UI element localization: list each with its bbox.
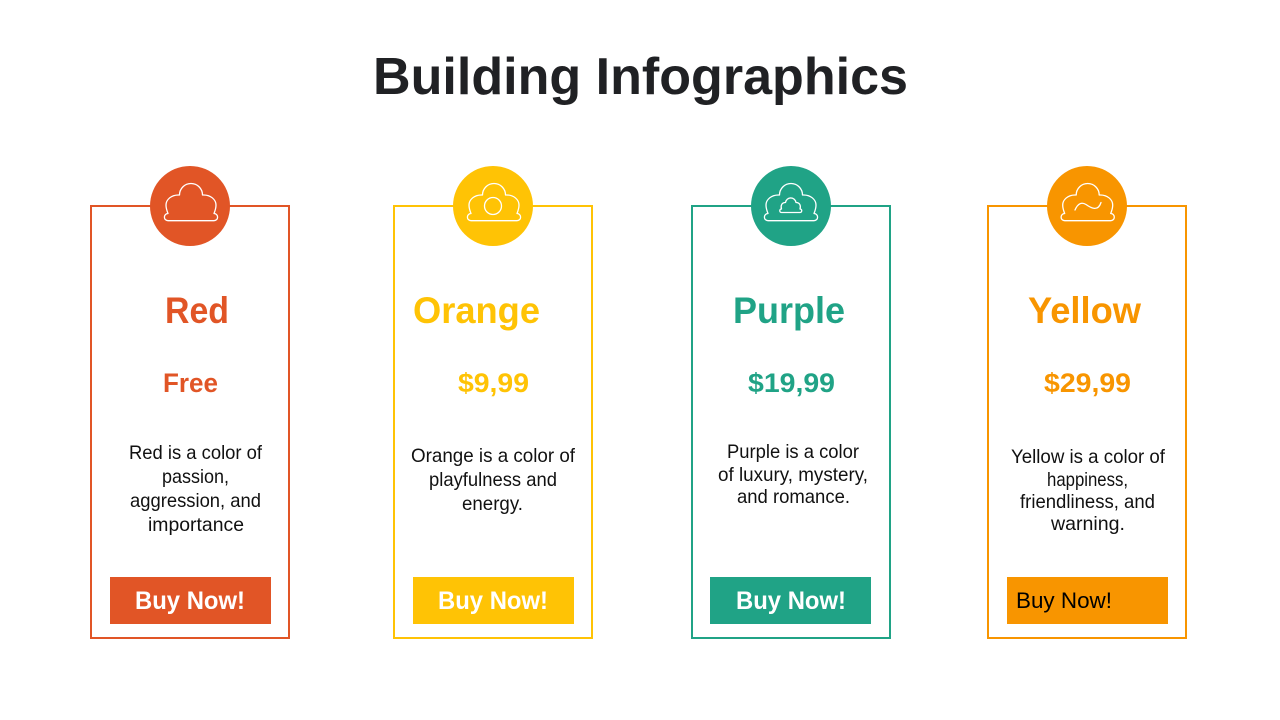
card border (692, 206, 890, 638)
description (129, 442, 263, 536)
panel: red plan (91, 166, 289, 638)
description: playfulness and (429, 469, 557, 491)
icon: cloud with small inner cloud (751, 166, 831, 246)
button: Buy Now! (135, 587, 245, 615)
price: $19,99 (748, 368, 835, 398)
description: of luxury, mystery, (718, 464, 868, 486)
button: Buy Now! (736, 587, 846, 615)
button: Buy Now! (438, 587, 548, 615)
icon: plain cloud (150, 166, 230, 246)
description: warning. (1050, 513, 1125, 535)
button (710, 577, 871, 624)
button (1007, 577, 1168, 624)
description (718, 441, 868, 508)
description (411, 445, 576, 515)
description: and romance. (737, 486, 850, 508)
description: Red is a color of (129, 442, 263, 464)
button: Buy Now! (1016, 588, 1112, 613)
description: happiness, (1047, 469, 1128, 491)
button (110, 577, 271, 624)
price: Free (163, 368, 218, 398)
description: Purple is a color (727, 441, 859, 463)
plan name: Orange (413, 290, 540, 331)
price: $9,99 (458, 368, 529, 398)
icon: cloud with sun circle (453, 166, 533, 246)
plan name: Red (165, 290, 229, 331)
plan name: Yellow (1028, 290, 1141, 331)
icon: cloud with wave (1047, 166, 1127, 246)
description: passion, (162, 466, 229, 488)
panel: purple plan (692, 166, 890, 638)
button (413, 577, 574, 624)
title: Building Infographics (373, 48, 908, 106)
description: friendliness, and (1020, 491, 1155, 513)
panel: orange plan (394, 166, 592, 638)
card border (91, 206, 289, 638)
description: energy. (462, 493, 523, 515)
price: $29,99 (1044, 368, 1131, 398)
description: aggression, and (130, 490, 261, 512)
panel: yellow plan (988, 166, 1186, 638)
description (1011, 446, 1166, 535)
description: Orange is a color of (411, 445, 576, 467)
card border (988, 206, 1186, 638)
card border (394, 206, 592, 638)
description: importance (148, 514, 244, 536)
plan name: Purple (733, 290, 845, 331)
description: Yellow is a color of (1011, 446, 1166, 468)
